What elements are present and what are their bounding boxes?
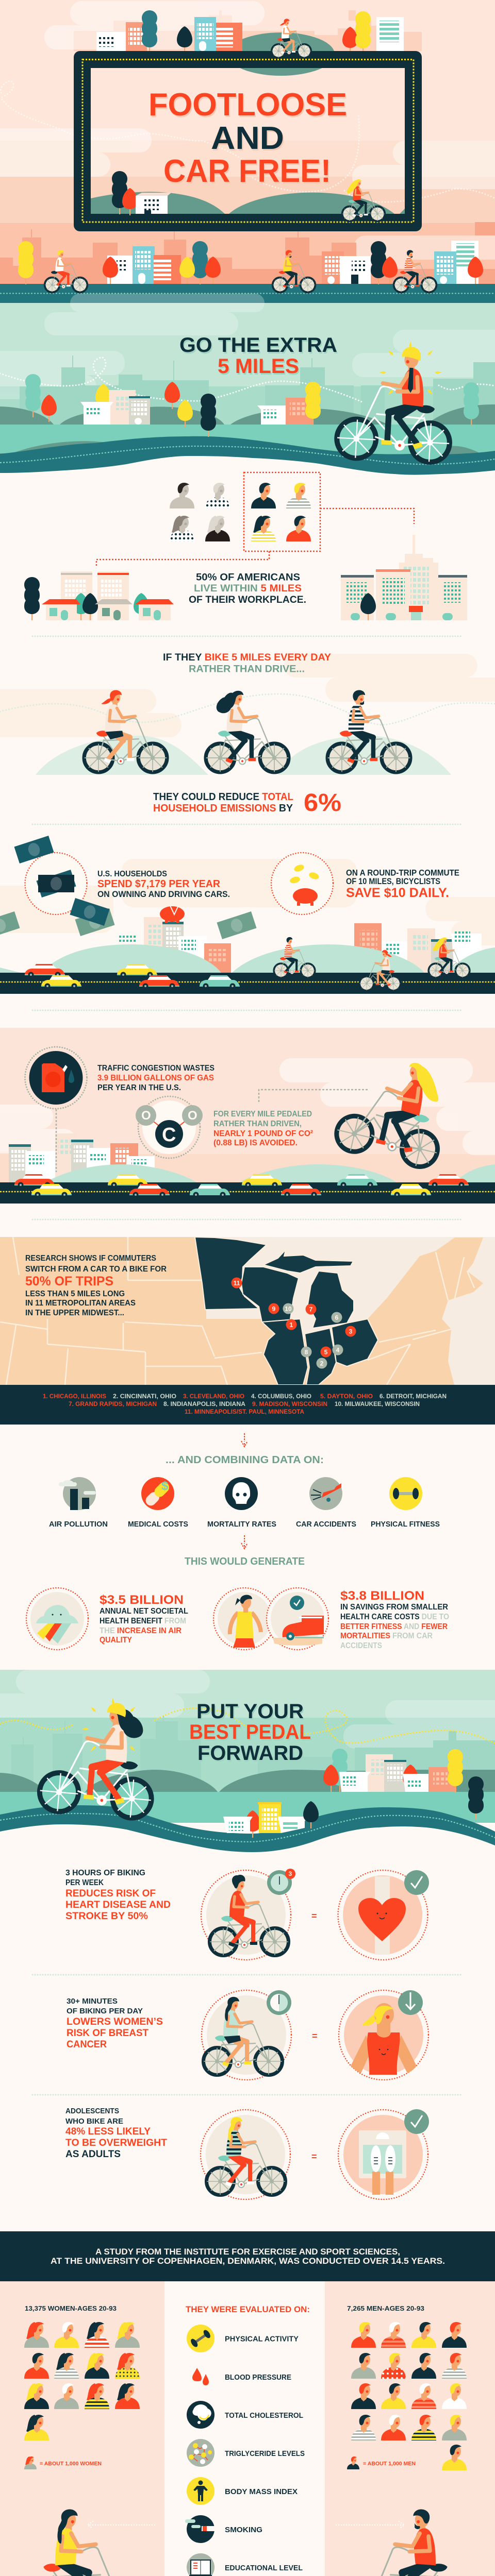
cyclist: long-haired woman xyxy=(206,691,289,772)
labels: data factors: MORTALITY RATES xyxy=(207,1520,276,1529)
title: put your best pedal forward: FORWARD xyxy=(197,1742,303,1765)
city legend band: 11. MINNEAPOLIS/ST. PAUL, MINNESOTA xyxy=(185,1409,304,1415)
map pins: 1 xyxy=(290,1321,293,1328)
road wave xyxy=(0,436,495,477)
cyclist: road right xyxy=(394,250,436,292)
illustration: braided rider xyxy=(202,1990,291,2080)
heading: if they bike: IF THEY BIKE 5 MILES EVERY DAY xyxy=(163,652,331,663)
trees and buildings xyxy=(25,374,479,437)
labels: data factors: MEDICAL COSTS xyxy=(128,1520,188,1529)
icon: CO2 molecule: O xyxy=(141,1109,151,1123)
skyline xyxy=(9,1133,495,1183)
title: put your best pedal forward: BEST PEDAL xyxy=(189,1721,311,1743)
text: household spend: U.S. HOUSEHOLDS xyxy=(97,870,167,878)
evaluated list: TRIGLYCERIDE LEVELS xyxy=(225,2450,305,2458)
stat: 50% of americans: 50% OF AMERICANS xyxy=(196,572,300,583)
cyclist: blonde woman wheelie xyxy=(333,1049,456,1170)
text: household spend: SPEND $7,179 PER YEAR xyxy=(97,878,221,890)
arrow: right dotted xyxy=(336,2521,404,2529)
road wave xyxy=(0,1805,495,1855)
text: 3.5 billion xyxy=(100,1593,188,1645)
icon: car accidents xyxy=(309,1477,342,1510)
text: heart stat: PER WEEK xyxy=(65,1878,104,1887)
arrow xyxy=(241,1535,248,1549)
top buildings and trees xyxy=(96,10,404,55)
icon: cholesterol xyxy=(187,2401,214,2429)
trees and buildings xyxy=(323,1749,484,1820)
cyclist: helmet woman with rays xyxy=(38,1697,159,1820)
icon: medical costs: $ xyxy=(161,1479,169,1493)
illustration: tracksuit rider: 3 xyxy=(289,1870,292,1877)
band: copenhagen study xyxy=(0,2231,495,2281)
road and cars xyxy=(0,1174,495,1204)
icon: gas can xyxy=(25,1047,87,1172)
labels: data factors: CAR ACCIDENTS xyxy=(296,1520,356,1529)
icon: clean air cloud xyxy=(26,1588,88,1650)
text: 3.8 billion: IN SAVINGS FROM SMALLER xyxy=(340,1603,448,1612)
top hill xyxy=(227,32,335,76)
text: research shows: IN THE UPPER MIDWEST... xyxy=(25,1309,124,1317)
text: 3.8 billion: $3.8 BILLION xyxy=(340,1589,424,1603)
city legend band: 7. GRAND RAPIDS, MICHIGAN xyxy=(69,1401,157,1408)
inner hills and tree xyxy=(91,171,405,215)
map pins: 7 xyxy=(309,1306,313,1313)
icon: triglyceride xyxy=(187,2439,214,2467)
text: breast cancer stat: OF BIKING PER DAY xyxy=(67,2007,143,2015)
dashed selection and connectors xyxy=(96,472,414,566)
map pins: 10 xyxy=(285,1306,292,1313)
text: 3.5 billion: $3.5 BILLION xyxy=(100,1593,184,1607)
stat: 6% emissions: 6% xyxy=(304,789,341,817)
legend: about 1000 women: = ABOUT 1,000 WOMEN xyxy=(40,2461,102,2467)
icon: broken piggy bank on tower xyxy=(160,906,185,923)
text: heart stat: STROKE BY 50% xyxy=(65,1911,148,1922)
map pins: 5 xyxy=(324,1349,328,1356)
stat: 50% of americans xyxy=(189,572,306,605)
panel: header scene xyxy=(0,0,495,303)
icon: air pollution xyxy=(59,1477,96,1510)
icon: physical fitness xyxy=(389,1477,422,1510)
map pins: 11 xyxy=(234,1280,240,1287)
map pins: 8 xyxy=(305,1349,308,1356)
panel: study comparison xyxy=(0,2281,495,2576)
street trees and buildings xyxy=(18,241,483,284)
city legend band: 10. MILWAUKEE, WISCONSIN xyxy=(335,1401,420,1408)
text: traffic congestion: 3.9 BILLION GALLONS OF GAS xyxy=(97,1074,214,1082)
cyclist: study man xyxy=(353,2509,464,2576)
text: 3.8 billion xyxy=(340,1589,449,1650)
text: household spend xyxy=(97,870,230,899)
text: heart stat: REDUCES RISK OF xyxy=(65,1888,156,1899)
map pins xyxy=(231,1278,356,1368)
center heading: THEY WERE EVALUATED ON: xyxy=(186,2304,310,2314)
labels: data factors: AIR POLLUTION xyxy=(49,1520,108,1529)
hills xyxy=(0,1770,495,1792)
evaluated list: TOTAL CHOLESTEROL xyxy=(225,2412,303,2420)
cyclist: top of frame xyxy=(272,19,311,58)
city legend band: 8. INDIANAPOLIS, INDIANA xyxy=(163,1401,245,1408)
text: breast cancer stat: LOWERS WOMEN’S xyxy=(67,2016,163,2027)
heading: this would generate: THIS WOULD GENERATE xyxy=(185,1556,305,1567)
text: co2 avoided xyxy=(213,1110,313,1147)
text: research shows: IN 11 METROPOLITAN AREAS xyxy=(25,1299,136,1308)
icon: blood pressure xyxy=(192,2368,209,2385)
band: copenhagen study: AT THE UNIVERSITY OF COPENHAGEN, DENMARK, WAS CONDUCTED OVER 14.5 YEARS. xyxy=(51,2257,445,2266)
text: overweight stat xyxy=(65,2107,167,2160)
text: breast cancer stat: 30+ MINUTES xyxy=(67,1997,118,2006)
evaluated list: SMOKING xyxy=(225,2526,262,2534)
text: traffic congestion xyxy=(97,1064,214,1092)
text: co2 avoided: (0.88 LB) IS AVOIDED. xyxy=(213,1139,298,1147)
small cyclist: blonde xyxy=(428,938,470,978)
text: heart stat: 3 HOURS OF BIKING xyxy=(65,1869,145,1877)
scene: buildings hills traffic xyxy=(0,917,495,994)
text: overweight stat: 48% LESS LIKELY xyxy=(65,2126,151,2137)
evaluated list xyxy=(185,2325,305,2576)
text: 3.5 billion: QUALITY xyxy=(100,1636,132,1645)
dotted route xyxy=(0,1708,495,1743)
icon: CO2 molecule: O xyxy=(188,1109,197,1123)
stat: 6% emissions: THEY COULD REDUCE TOTAL xyxy=(153,791,293,803)
text: traffic congestion: PER YEAR IN THE U.S. xyxy=(97,1083,181,1092)
road xyxy=(0,284,495,303)
icon: safer car xyxy=(267,1588,328,1650)
text: household spend: ON OWNING AND DRIVING CARS. xyxy=(97,890,230,899)
title: AND xyxy=(211,121,284,156)
city legend band: 2. CINCINNATI, OHIO xyxy=(113,1394,176,1400)
map pins: 6 xyxy=(335,1314,339,1321)
title: go the extra 5 miles xyxy=(179,334,337,378)
map pins: 2 xyxy=(320,1360,324,1367)
small cyclist: striped xyxy=(274,937,315,978)
panel: bike rather than drive xyxy=(0,652,495,817)
illustration: happy heart xyxy=(338,1870,429,1960)
city legend band: 4. COLUMBUS, OHIO xyxy=(251,1394,311,1400)
men header: 7,265 MEN-AGES 20-93 xyxy=(347,2305,424,2312)
arrow: left dotted xyxy=(88,2521,155,2529)
panel: go the extra 5 miles scene xyxy=(0,294,495,479)
icon: CO2 molecule xyxy=(136,1096,203,1158)
text: research shows xyxy=(25,1254,167,1317)
title: FOOTLOOSE xyxy=(148,87,347,123)
women pictogram xyxy=(24,2322,140,2441)
map pins: 4 xyxy=(336,1347,340,1354)
text: 3.5 billion: ANNUAL NET SOCIETAL xyxy=(100,1607,188,1616)
panel: gas and CO2 xyxy=(0,1028,495,1204)
text: 3.8 billion: MORTALITIES FROM CAR xyxy=(340,1632,433,1640)
city legend band: 9. MADISON, WISCONSIN xyxy=(252,1401,327,1408)
text: save daily: ON A ROUND-TRIP COMMUTE xyxy=(346,869,459,878)
title: go the extra 5 miles: 5 MILES xyxy=(218,355,299,378)
heading: if they bike xyxy=(163,652,331,675)
icon: physical activity xyxy=(187,2325,214,2352)
title: put your best pedal forward: PUT YOUR xyxy=(196,1700,304,1723)
panel: put your best pedal forward scene xyxy=(0,1670,495,1860)
cars in traffic xyxy=(25,964,240,989)
cyclist: road left xyxy=(45,250,87,292)
labels: data factors xyxy=(49,1520,440,1529)
text: co2 avoided: RATHER THAN DRIVEN, xyxy=(213,1120,302,1128)
icon: piggy bank circle xyxy=(271,853,333,914)
text: breast cancer stat: RISK OF BREAST xyxy=(67,2028,148,2039)
band: copenhagen study: A STUDY FROM THE INSTITUTE FOR EXERCISE AND SPORT SCIENCES, xyxy=(95,2247,400,2257)
text: 3.5 billion: THE INCREASE IN AIR xyxy=(100,1626,182,1635)
stat: 50% of americans: OF THEIR WORKPLACE. xyxy=(189,594,306,605)
map pins: 9 xyxy=(272,1306,276,1313)
cyclist: road middle xyxy=(273,250,315,292)
text: breast cancer stat xyxy=(67,1997,163,2050)
text: overweight stat: ADOLESCENTS xyxy=(65,2107,119,2115)
small cyclist: red hair xyxy=(359,950,401,991)
icon: fitter woman xyxy=(213,1588,275,1650)
illustration: offices xyxy=(341,535,467,620)
frame dashes xyxy=(82,60,414,222)
stat: 50% of americans: LIVE WITHIN 5 MILES xyxy=(194,583,302,594)
text: 3.8 billion: ACCIDENTS xyxy=(340,1641,382,1650)
text: research shows: 50% OF TRIPS xyxy=(25,1274,113,1289)
text: heart stat xyxy=(65,1869,171,1922)
heading: combining data: ... AND COMBINING DATA ON: xyxy=(166,1454,324,1466)
equals: = xyxy=(311,1911,317,1921)
text: heart stat: HEART DISEASE AND xyxy=(65,1900,171,1910)
text: 3.5 billion: HEALTH BENEFIT FROM xyxy=(100,1617,186,1625)
panel: map of upper midwest xyxy=(0,1237,495,1425)
legend: about 1000 men: = ABOUT 1,000 MEN xyxy=(363,2461,416,2467)
legend: about 1000 men xyxy=(347,2456,416,2469)
labels: data factors: PHYSICAL FITNESS xyxy=(371,1520,440,1529)
text: overweight stat: TO BE OVERWEIGHT xyxy=(65,2138,167,2148)
buildings in valley xyxy=(223,1801,319,1838)
text: research shows: SWITCH FROM A CAR TO A BIKE FOR xyxy=(25,1265,167,1274)
text: co2 avoided: NEARLY 1 POUND OF CO² xyxy=(213,1129,313,1138)
title: CAR FREE! xyxy=(163,154,331,189)
text: research shows: RESEARCH SHOWS IF COMMUTERS xyxy=(25,1254,156,1263)
arrow xyxy=(241,1433,248,1447)
illustration: healthy torso xyxy=(339,1990,428,2080)
text: research shows: LESS THAN 5 MILES LONG xyxy=(25,1290,125,1298)
illustration: teen rider xyxy=(201,2110,290,2199)
icon: smoking xyxy=(185,2515,216,2543)
row: 3 hours biking xyxy=(65,1869,429,1960)
heading: if they bike: RATHER THAN DRIVE... xyxy=(189,664,305,675)
text: traffic congestion: TRAFFIC CONGESTION WASTES xyxy=(97,1064,214,1073)
icon: education xyxy=(187,2553,214,2576)
text: overweight stat: AS ADULTS xyxy=(65,2149,121,2160)
city legend band: 6. DETROIT, MICHIGAN xyxy=(380,1394,447,1400)
cyclist: in frame xyxy=(342,179,385,221)
title xyxy=(148,87,347,189)
icon: money circle xyxy=(0,836,257,939)
midwest states xyxy=(195,1237,378,1385)
cyclist: helmet man with rays xyxy=(336,341,454,463)
stat: 6% emissions: HOUSEHOLD EMISSIONS BY xyxy=(153,803,293,814)
dotted route xyxy=(0,358,495,402)
hills xyxy=(0,404,495,425)
text: 3.8 billion: HEALTH CARE COSTS DUE TO xyxy=(340,1613,449,1621)
icons: five data factors xyxy=(59,1477,422,1510)
evaluated list: PHYSICAL ACTIVITY xyxy=(225,2335,299,2343)
equals: = xyxy=(311,2151,317,2162)
equals: = xyxy=(312,2031,318,2041)
icon: body mass index xyxy=(187,2477,214,2505)
cyclist: red ponytail woman xyxy=(84,690,167,772)
row: adolescents xyxy=(65,2107,429,2199)
text: 3.8 billion: BETTER FITNESS AND FEWER xyxy=(340,1622,448,1631)
icon: mortality rates xyxy=(225,1477,258,1510)
map pins: 3 xyxy=(349,1328,353,1335)
illustration: tracksuit rider xyxy=(201,1869,295,1960)
legend: about 1000 women xyxy=(24,2456,102,2469)
women header: 13,375 WOMEN-AGES 20-93 xyxy=(25,2305,117,2312)
evaluated list: EDUCATIONAL LEVEL xyxy=(225,2564,303,2572)
city legend band xyxy=(0,1385,495,1425)
panel: cost of driving xyxy=(0,836,495,994)
text: overweight stat: WHO BIKE ARE xyxy=(65,2117,123,2126)
title: put your best pedal forward xyxy=(189,1700,311,1765)
icon: CO2 molecule: C xyxy=(162,1124,176,1146)
icon: medical costs xyxy=(141,1477,174,1510)
city legend band: 5. DAYTON, OHIO xyxy=(320,1394,373,1400)
text: breast cancer stat: CANCER xyxy=(67,2039,107,2050)
row: 30 minutes biking xyxy=(67,1990,428,2080)
text: save daily: SAVE $10 DAILY. xyxy=(346,886,449,900)
city legend band: 1. CHICAGO, ILLINOIS xyxy=(43,1394,106,1400)
stat: 6% emissions xyxy=(153,789,341,817)
illustration: homes xyxy=(24,571,174,620)
frame xyxy=(74,51,422,231)
title: go the extra 5 miles: GO THE EXTRA xyxy=(179,334,337,357)
text: co2 avoided: FOR EVERY MILE PEDALED xyxy=(213,1110,312,1118)
evaluated list: BLOOD PRESSURE xyxy=(225,2374,291,2382)
text: save daily: OF 10 MILES, BICYCLISTS xyxy=(346,877,440,886)
cyclist: study woman xyxy=(27,2509,138,2576)
text: save daily xyxy=(346,869,459,900)
city legend band: 3. CLEVELAND, OHIO xyxy=(183,1394,244,1400)
cyclist: striped-shirt man xyxy=(327,690,410,772)
illustration: weighing scale xyxy=(338,2109,429,2199)
people grid: americans xyxy=(170,483,311,541)
men pictogram xyxy=(351,2322,467,2470)
evaluated list: BODY MASS INDEX xyxy=(225,2488,298,2496)
